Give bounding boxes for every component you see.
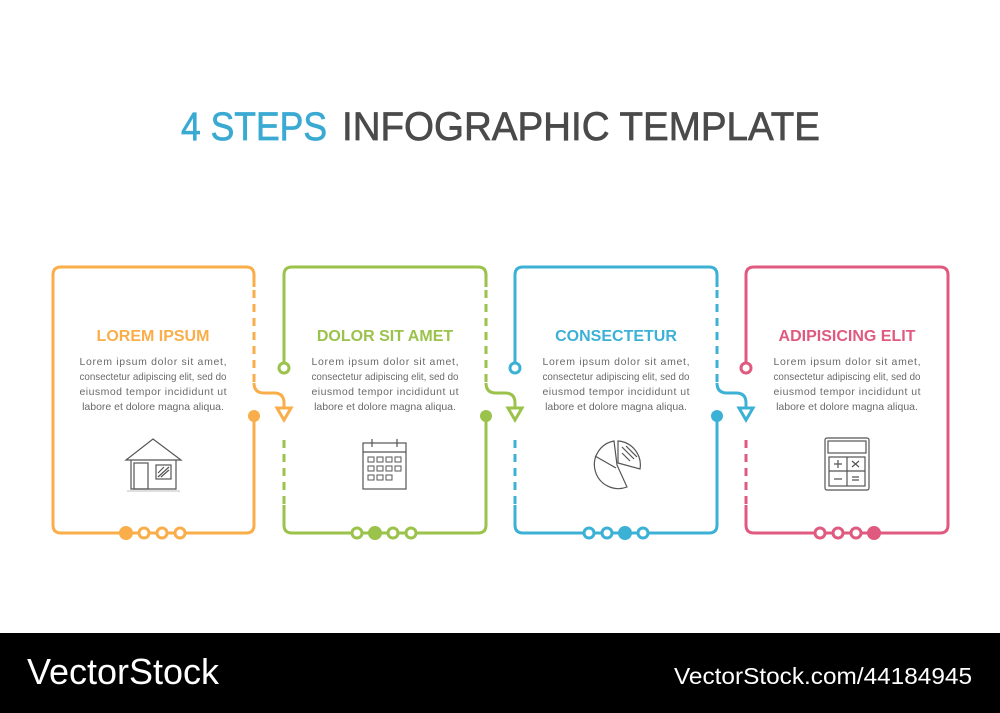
title: 4 STEPS xyxy=(181,105,327,149)
text block: step 1: Lorem ipsum dolor sit amet, xyxy=(80,356,226,368)
text block: step 2: labore et dolore magna aliqua. xyxy=(314,401,456,413)
text block: step 3 xyxy=(542,356,690,413)
text block: step 4: eiusmod tempor incididunt ut xyxy=(774,386,921,398)
text block: step 2: Lorem ipsum dolor sit amet, xyxy=(312,356,458,368)
text block: step 4: labore et dolore magna aliqua. xyxy=(776,401,918,413)
panel: step 1 (orange) xyxy=(53,267,291,538)
text block: step 1: labore et dolore magna aliqua. xyxy=(82,401,224,413)
icon: house xyxy=(126,439,181,491)
text block: step 4 xyxy=(774,356,921,413)
footer bar: VectorStock xyxy=(27,651,220,692)
footer bar xyxy=(0,633,1000,713)
heading: step 4: ADIPISICING ELIT xyxy=(779,328,916,345)
panel: step 2 (green) xyxy=(279,267,522,538)
text block: step 1: eiusmod tempor incididunt ut xyxy=(80,386,227,398)
text block: step 3: Lorem ipsum dolor sit amet, xyxy=(542,356,690,368)
text block: step 3: consectetur adipiscing elit, sed do xyxy=(542,371,690,383)
icon: calendar xyxy=(363,439,406,489)
text block: step 2: eiusmod tempor incididunt ut xyxy=(312,386,459,398)
icon: calculator xyxy=(825,438,869,490)
panel: step 4 (pink) xyxy=(741,267,948,538)
heading: step 3: CONSECTETUR xyxy=(555,328,677,345)
footer bar: VectorStock.com/44184945 xyxy=(674,663,972,689)
text block: step 4: consectetur adipiscing elit, sed do xyxy=(774,371,921,383)
heading: step 2: DOLOR SIT AMET xyxy=(317,328,453,345)
text block: step 4: Lorem ipsum dolor sit amet, xyxy=(774,356,920,368)
text block: step 2: consectetur adipiscing elit, sed do xyxy=(312,371,459,383)
text block: step 1 xyxy=(80,356,227,413)
text block: step 3: labore et dolore magna aliqua. xyxy=(545,401,687,413)
icon: pie chart xyxy=(594,441,640,489)
title: INFOGRAPHIC TEMPLATE xyxy=(342,105,820,149)
panel: step 3 (blue) xyxy=(510,267,753,538)
text block: step 3: eiusmod tempor incididunt ut xyxy=(542,386,690,398)
heading: step 1: LOREM IPSUM xyxy=(97,328,209,345)
text block: step 2 xyxy=(312,356,459,413)
text block: step 1: consectetur adipiscing elit, sed do xyxy=(80,371,227,383)
